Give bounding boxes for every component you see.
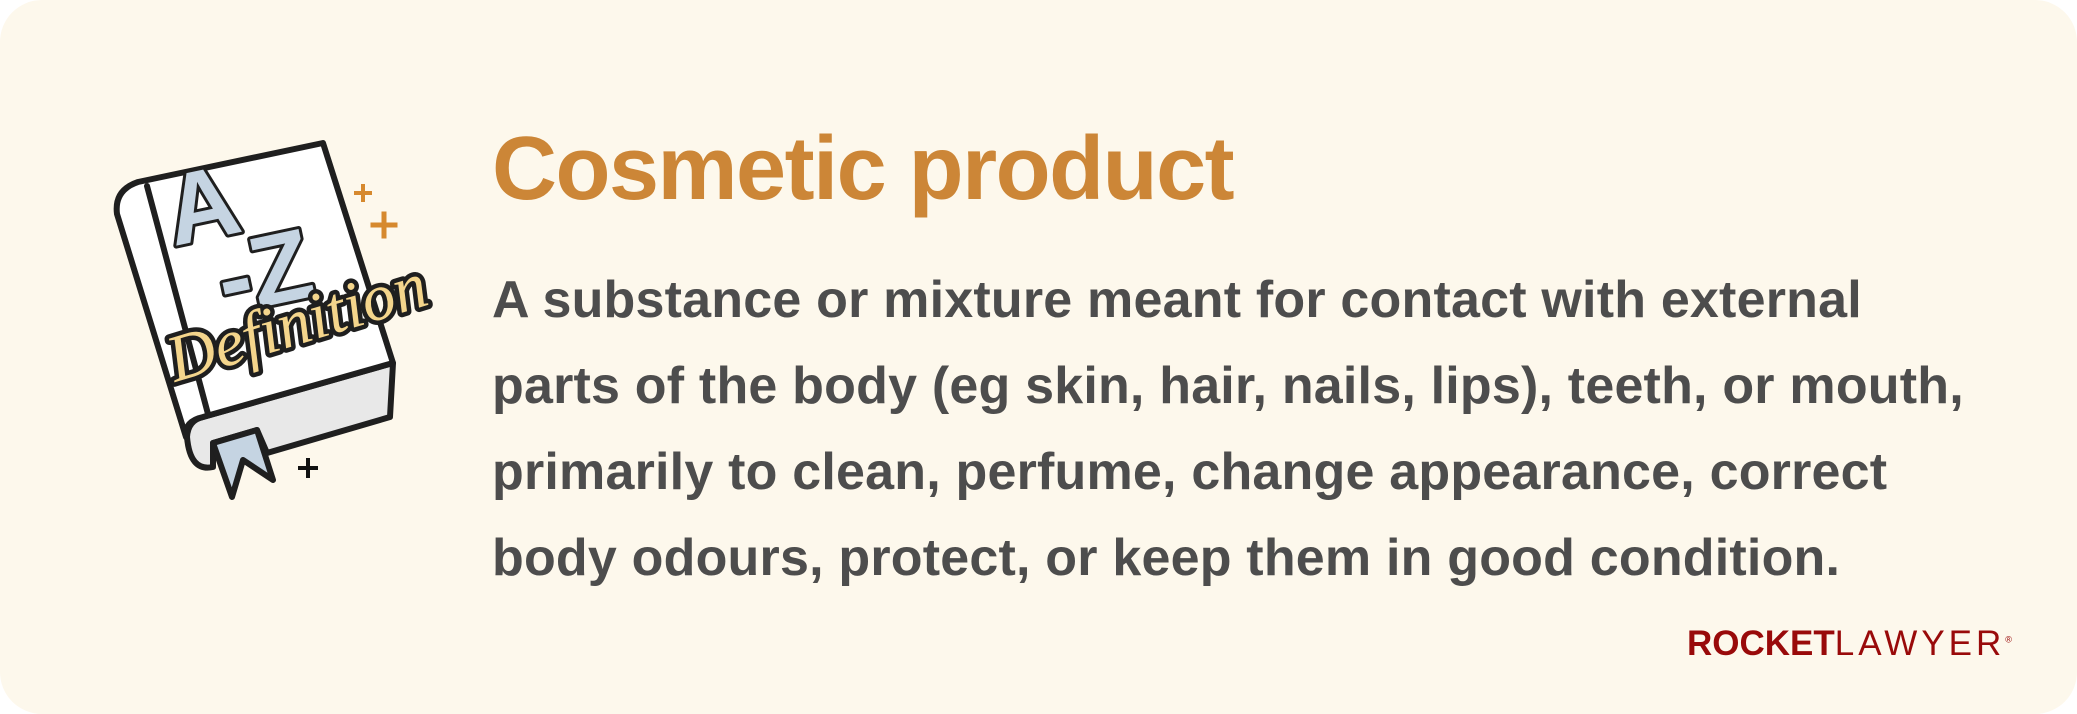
Definition script: Definition xyxy=(157,248,436,397)
sparkles xyxy=(300,186,395,476)
page block xyxy=(187,363,393,468)
cover xyxy=(117,143,393,437)
icon: A-Z definition book xyxy=(114,140,436,500)
text block: definition xyxy=(492,271,1964,587)
text block: definition: parts of the body (eg skin, hair, nails, lips), teeth, or mouth, xyxy=(492,357,1964,415)
title: Cosmetic product xyxy=(492,119,1233,219)
bookmark xyxy=(213,430,273,497)
letters A-Z: -Z xyxy=(207,207,322,336)
text block: definition: primarily to clean, perfume, change appearance, correct xyxy=(492,443,1887,501)
text block: definition: body odours, protect, or keep them in good condition. xyxy=(492,529,1840,587)
letters A-Z: A xyxy=(155,143,249,268)
letters A-Z xyxy=(155,131,322,344)
text block: definition: A substance or mixture meant for contact with external xyxy=(492,271,1862,329)
logo: ROCKETLAWYER® xyxy=(1687,624,2012,663)
